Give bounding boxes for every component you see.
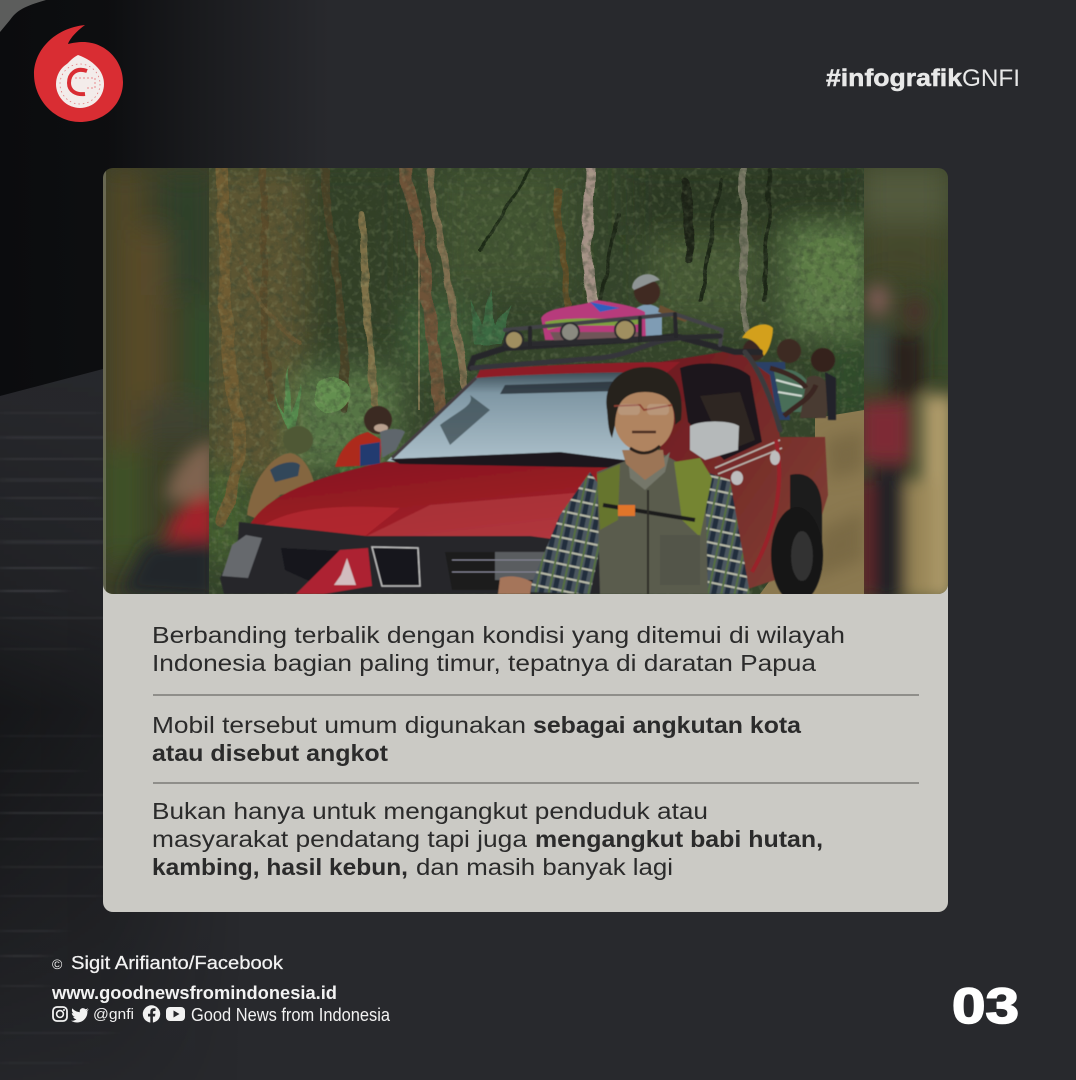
- left people: [247, 406, 405, 518]
- text block 1: Berbanding terbalik dengan kondisi yang ditemui di wilayah: [152, 622, 845, 648]
- man with glasses: [498, 367, 750, 594]
- hashtag: #infografik: [826, 65, 963, 92]
- page name: Good News from Indonesia: [191, 1005, 391, 1025]
- logo: [34, 25, 123, 122]
- background: [0, 0, 260, 995]
- man on the roof: [632, 274, 690, 336]
- icon: twitter: [71, 1008, 89, 1022]
- website: www.goodnewsfromindonesia.id: [51, 983, 337, 1003]
- text block 2: atau disebut angkot: [152, 740, 388, 766]
- icon: youtube: [166, 1007, 185, 1021]
- page number: 03: [952, 978, 1019, 1034]
- icon: facebook: [143, 1005, 160, 1023]
- forest: [205, 165, 870, 594]
- people at the back: [742, 324, 836, 420]
- text block 3: Bukan hanya untuk mengangkut penduduk atau: [152, 798, 708, 824]
- red truck: [220, 350, 828, 603]
- figures and truck: [220, 274, 836, 603]
- logo emblem: garuda G: [56, 55, 104, 108]
- text block 2: sebagai angkutan kota: [533, 712, 801, 738]
- text block 3: kambing, hasil kebun,: [152, 854, 408, 880]
- road: [760, 410, 864, 594]
- hashtag: GNFI: [962, 65, 1020, 92]
- trunks: [222, 168, 770, 520]
- text block 3: masyarakat pendatang tapi juga: [152, 826, 527, 852]
- text block 3: dan masih banyak lagi: [416, 854, 673, 880]
- hood: [250, 462, 608, 540]
- handle: @gnfi: [93, 1006, 134, 1023]
- roof rack: [470, 314, 780, 430]
- grille and bumper: [220, 522, 620, 594]
- text block 1: Indonesia bagian paling timur, tepatnya di daratan Papua: [152, 650, 816, 676]
- icon: instagram: [53, 1007, 67, 1021]
- hashtag: [826, 65, 1020, 92]
- photo credit: Sigit Arifianto/Facebook: [71, 952, 284, 973]
- photo: blurred left side: [103, 168, 215, 600]
- text block 3: mengangkut babi hutan,: [535, 826, 823, 852]
- panel: text card: [103, 500, 948, 912]
- text block 3: [152, 798, 823, 880]
- social row: [53, 1005, 391, 1025]
- photo: main picture: [205, 165, 870, 603]
- text block 1: [152, 622, 845, 676]
- photo edge fade: [103, 168, 106, 594]
- side mirror: [690, 422, 739, 460]
- blanket: [541, 300, 646, 342]
- photo: blurred right side: [864, 168, 948, 594]
- windshield: [386, 372, 667, 463]
- wheel: [790, 474, 822, 570]
- truck body and door: [660, 350, 828, 594]
- text block 2: [152, 712, 801, 766]
- text block 2: Mobil tersebut umum digunakan: [152, 712, 526, 738]
- photo: [103, 165, 955, 603]
- photo credit: ©: [52, 956, 63, 972]
